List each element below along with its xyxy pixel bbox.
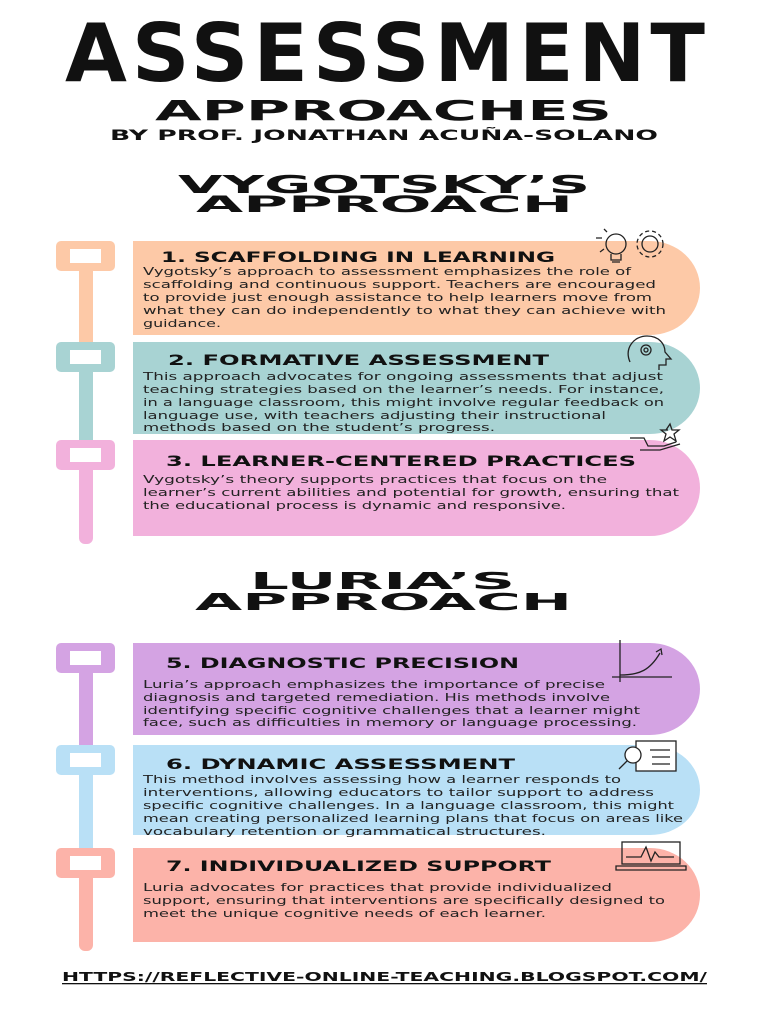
heading: Vygotsky's approach: VYGOTSKY’S xyxy=(178,170,590,199)
panel: 7 individualized xyxy=(133,848,700,942)
panel: 2 formative: 2. FORMATIVE ASSESSMENT xyxy=(168,353,550,369)
panel: 7 individualized: Luria advocates for practices that provide individualized xyxy=(143,882,612,894)
panel: 6 dynamic: This method involves assessing how a learner responds to xyxy=(141,774,621,786)
icon: laptop pulse xyxy=(616,842,686,870)
panel: 6 dynamic: vocabulary retention or grammatical structures. xyxy=(143,826,546,838)
heading: Luria's approach: APPROACH xyxy=(195,590,572,616)
panel: 3 learner-centered: 3. LEARNER-CENTERED PRACTICES xyxy=(166,454,636,470)
panel: 3 learner-centered: learner’s current abilities and potential for growth, ensuring that xyxy=(143,487,679,499)
icon: hand with star xyxy=(630,424,680,450)
panel: 7 individualized: 7. INDIVIDUALIZED SUPPORT xyxy=(166,859,552,875)
panel: 6 dynamic: specific cognitive challenges. In a language classroom, this might xyxy=(143,800,674,812)
icon: magnifier document xyxy=(619,741,676,771)
panel: 2 formative: methods based on the student’s progress. xyxy=(143,422,495,434)
panel: 3 learner-centered: the educational process is dynamic and responsive. xyxy=(143,500,566,512)
title: APPROACHES xyxy=(155,94,612,127)
panel: 2 formative xyxy=(133,342,700,434)
panel: 1 scaffolding: Vygotsky’s approach to assessment emphasizes the role of xyxy=(143,266,631,278)
panel: 2 formative: teaching strategies based on the learner’s needs. For instance, xyxy=(143,384,664,396)
panel: 7 individualized: meet the unique cognitive needs of each learner. xyxy=(143,908,546,920)
title: ASSESSMENT xyxy=(65,7,705,100)
heading: Luria's approach: LURIA’S xyxy=(250,569,515,595)
footer url: HTTPS://REFLECTIVE-ONLINE-TEACHING.BLOGSPOT.COM/ xyxy=(62,970,708,984)
panel: 1 scaffolding: 1. SCAFFOLDING IN LEARNING xyxy=(161,250,555,266)
icon: bulb and gear xyxy=(596,229,663,262)
icon: graph xyxy=(612,640,672,682)
panel: 1 scaffolding xyxy=(133,241,700,335)
panel: 1 scaffolding: what they can do independently to what they can achieve with xyxy=(143,305,666,317)
panel: 5 diagnostic: diagnosis and targeted remediation. His methods involve xyxy=(143,692,610,704)
panel: 1 scaffolding: scaffolding and continuous support. Teachers are encouraged xyxy=(143,279,656,291)
panel: 5 diagnostic xyxy=(133,643,700,735)
timeline: Luria xyxy=(56,643,115,951)
icon: head xyxy=(628,336,671,370)
panel: 7 individualized: support, ensuring that interventions are specifically designed to xyxy=(143,895,665,907)
panel: 1 scaffolding: to provide just enough assistance to help learners move from xyxy=(143,292,652,304)
panel: 5 diagnostic: face, such as difficulties in memory or language processing. xyxy=(143,717,637,729)
panel: 6 dynamic: mean creating personalized learning plans that focus on areas like xyxy=(143,813,683,825)
panel: 5 diagnostic: 5. DIAGNOSTIC PRECISION xyxy=(166,656,519,672)
panel: 6 dynamic: 6. DYNAMIC ASSESSMENT xyxy=(166,757,516,773)
panel: 2 formative: in a language classroom, this might involve regular feedback on xyxy=(143,397,664,409)
panel: 6 dynamic xyxy=(133,745,700,838)
panel: 2 formative: This approach advocates for ongoing assessments that adjust xyxy=(141,371,663,383)
panel: 3 learner-centered: Vygotsky’s theory supports practices that focus on the xyxy=(143,474,607,486)
heading: Vygotsky's approach xyxy=(178,170,590,218)
panel: 1 scaffolding: guidance. xyxy=(143,318,221,330)
panel: 6 dynamic: interventions, allowing educators to tailor support to address xyxy=(143,787,654,799)
panel: 5 diagnostic: identifying specific cognitive challenges that a learner might xyxy=(143,705,640,717)
panel: 3 learner-centered xyxy=(133,440,700,536)
timeline: Vygotsky xyxy=(56,241,115,544)
heading: Luria's approach xyxy=(195,569,572,616)
panel: 2 formative: language use, with teachers adjusting their instructional xyxy=(143,410,606,422)
panel: 5 diagnostic: Luria’s approach emphasizes the importance of precise xyxy=(143,679,605,691)
heading: Vygotsky's approach: APPROACH xyxy=(196,193,573,218)
byline: BY PROF. JONATHAN ACUÑA-SOLANO xyxy=(110,127,658,144)
